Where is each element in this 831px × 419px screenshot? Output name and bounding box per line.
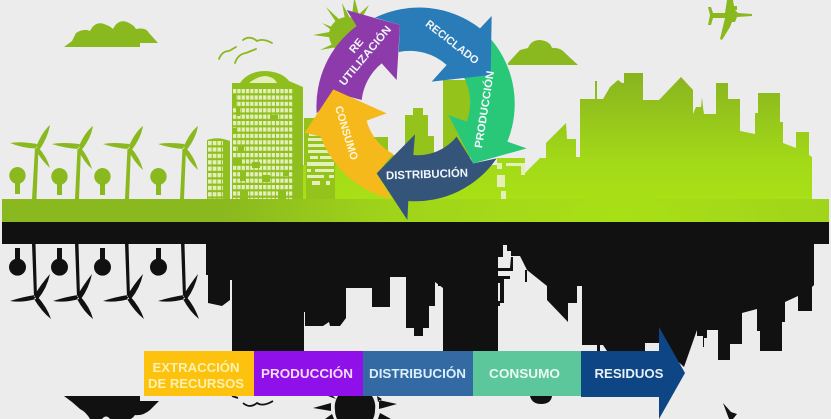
central buildings behind the cycle [304, 80, 470, 199]
small tower [207, 138, 230, 199]
step: residuos arrow [581, 327, 685, 419]
step: residuos arrow: RESIDUOS [594, 366, 664, 381]
inverted tree 1 [9, 248, 26, 276]
wind turbine 1 [10, 125, 50, 199]
inverted turbine 4 [158, 244, 199, 319]
small windows building [306, 131, 335, 199]
panel: green clean city [2, 0, 829, 222]
inverted turbine 3 [103, 244, 144, 319]
wind turbine 4 [158, 126, 198, 199]
arrow: reutilización [316, 10, 400, 113]
step: producción: PRODUCCIÓN [261, 366, 353, 381]
arrow: distribución [377, 134, 497, 220]
label: re: RE [347, 36, 366, 56]
cycle diagram [305, 8, 527, 220]
step: distribución: DISTRIBUCIÓN [369, 366, 466, 381]
arrow: producción [448, 40, 527, 163]
wind turbine 2 [52, 126, 93, 199]
step: extracción de recursos [144, 351, 254, 396]
label: distribución: DISTRIBUCIÓN [386, 167, 468, 182]
tree 3 [94, 168, 111, 195]
tree 2 [51, 168, 68, 195]
label: reciclado: RECICLADO [423, 18, 481, 67]
skyline right [497, 73, 812, 199]
inverted tree 4 [150, 248, 167, 276]
inverted small cloud [530, 396, 552, 404]
process bar [144, 327, 685, 419]
label: consumo: CONSUMO [332, 105, 360, 162]
step: consumo [473, 351, 581, 396]
step: producción [254, 351, 363, 396]
arrow: consumo [305, 89, 393, 199]
label: utilización: UTILIZACIÓN [337, 23, 394, 88]
arrow: reciclado [375, 8, 492, 82]
inverted birds [232, 396, 273, 406]
label: producción: PRODUCCIÓN [472, 70, 497, 149]
tree 1 [9, 167, 26, 194]
step: extracción de recursos: DE RECURSOS [148, 376, 244, 391]
black window details [438, 257, 527, 306]
inverted turbine 1 [10, 244, 51, 319]
step: consumo: CONSUMO [489, 366, 560, 381]
office tower [232, 71, 303, 200]
panel: black inverted city [2, 222, 829, 419]
plane [708, 0, 752, 40]
ground [2, 199, 829, 222]
right windows detail [497, 163, 525, 199]
inverted turbine 2 [53, 244, 93, 319]
inverted plane [723, 403, 737, 419]
black skyline [2, 222, 829, 367]
cloud right [508, 40, 578, 65]
tree 4 [150, 168, 167, 195]
birds [219, 38, 272, 63]
arrow shapes [305, 8, 527, 220]
inverted tree 3 [94, 248, 111, 276]
inverted tree 2 [51, 248, 68, 276]
inverted cloud [64, 396, 159, 419]
inverted sun [313, 396, 397, 419]
step: extracción de recursos: EXTRACCIÓN [152, 360, 240, 375]
step: distribución [363, 351, 473, 396]
wind turbine 3 [103, 126, 143, 199]
cloud left [64, 21, 158, 47]
sun [313, 0, 369, 53]
